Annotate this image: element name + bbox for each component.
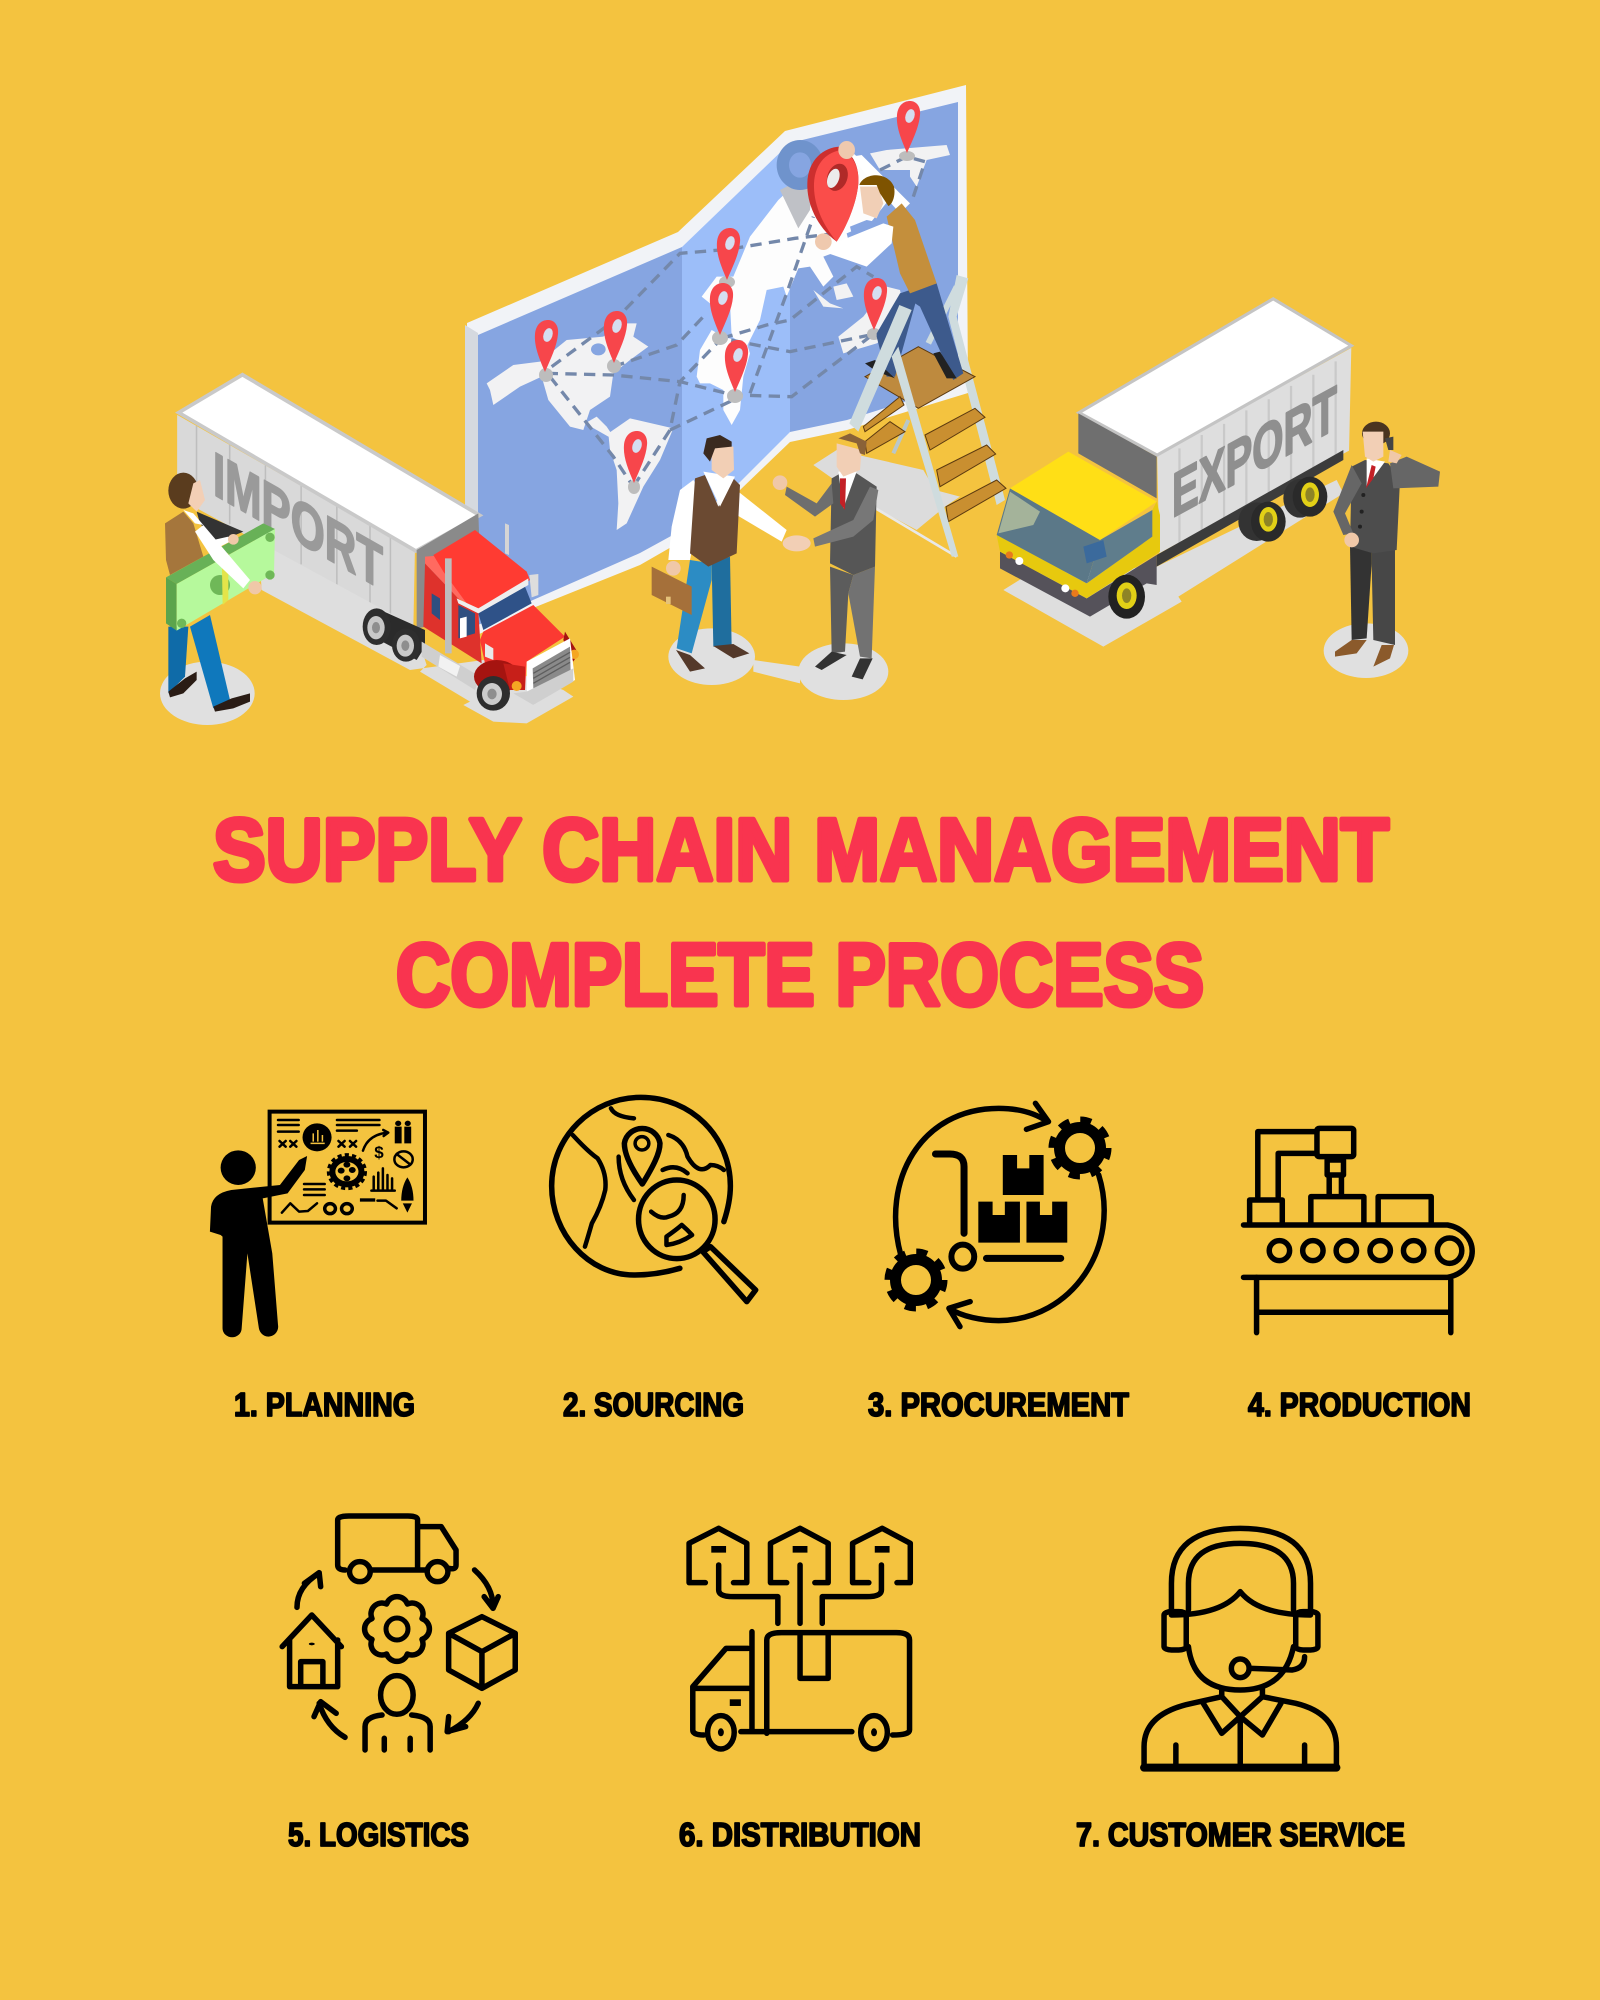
label: production: 4. PRODUCTION [1248, 1386, 1471, 1423]
man in grey suit [773, 433, 878, 679]
man in vest with briefcase [652, 435, 787, 672]
label: sourcing: 2. SOURCING [563, 1386, 744, 1423]
icon: centre gear [365, 1597, 429, 1661]
label: logistics: 5. LOGISTICS [288, 1816, 469, 1853]
icon: globe with magnifier [552, 1097, 756, 1302]
label: planning: 1. PLANNING [234, 1386, 415, 1423]
ladder rear parts and steps [863, 275, 1006, 522]
IMPORT lettering: IMPORT [213, 439, 383, 604]
step 5: logistics [282, 1516, 515, 1853]
handshake men [652, 433, 888, 700]
step 6: distribution [679, 1528, 921, 1853]
icon: lower gear [888, 1252, 944, 1308]
ladder front rails [849, 305, 958, 557]
platforms [668, 628, 888, 700]
man on ladder [815, 141, 963, 380]
world continents [487, 140, 950, 530]
label: procurement: 3. PROCUREMENT [868, 1386, 1129, 1423]
icon: person presenting at board [210, 1112, 425, 1337]
ghost pin shadow [777, 140, 823, 228]
step 3: procurement [868, 1103, 1129, 1423]
man on phone [1324, 422, 1440, 678]
man holding money [160, 473, 275, 725]
big red pin [807, 147, 858, 242]
dashed routes [547, 157, 925, 487]
icon: robotic arm and conveyor belt [1244, 1128, 1472, 1333]
title [213, 800, 1389, 1024]
hero illustration: isometric import export scene [160, 85, 1472, 1853]
import truck [177, 375, 579, 723]
step 7: customer service [1076, 1528, 1405, 1853]
icon: dollar sign on board: $ [374, 1143, 384, 1162]
step ladder and man placing pin [813, 141, 1006, 557]
step 2: sourcing [552, 1097, 756, 1423]
import truck cab and wheels [258, 513, 579, 723]
title: SUPPLY CHAIN MANAGEMENT [213, 800, 1389, 899]
icon: logistics cycle [282, 1516, 515, 1750]
export truck [997, 299, 1351, 647]
title: COMPLETE PROCESS [396, 925, 1204, 1024]
world map [465, 85, 968, 640]
icon: delivery truck to three houses [689, 1528, 910, 1749]
step 4: production [1244, 1128, 1472, 1423]
step 1: planning [210, 1112, 425, 1423]
map pins [535, 101, 920, 494]
icon: upper gear [1052, 1120, 1108, 1176]
export truck cab and wheels [997, 413, 1343, 647]
label: customer service: 7. CUSTOMER SERVICE [1076, 1816, 1405, 1853]
label: distribution: 6. DISTRIBUTION [679, 1816, 921, 1853]
icon: headset agent [1144, 1528, 1336, 1768]
EXPORT lettering: EXPORT [1172, 373, 1337, 532]
ground shadow under ladder [813, 450, 960, 530]
icon: trolley, boxes and cycle arrows [896, 1103, 1104, 1327]
